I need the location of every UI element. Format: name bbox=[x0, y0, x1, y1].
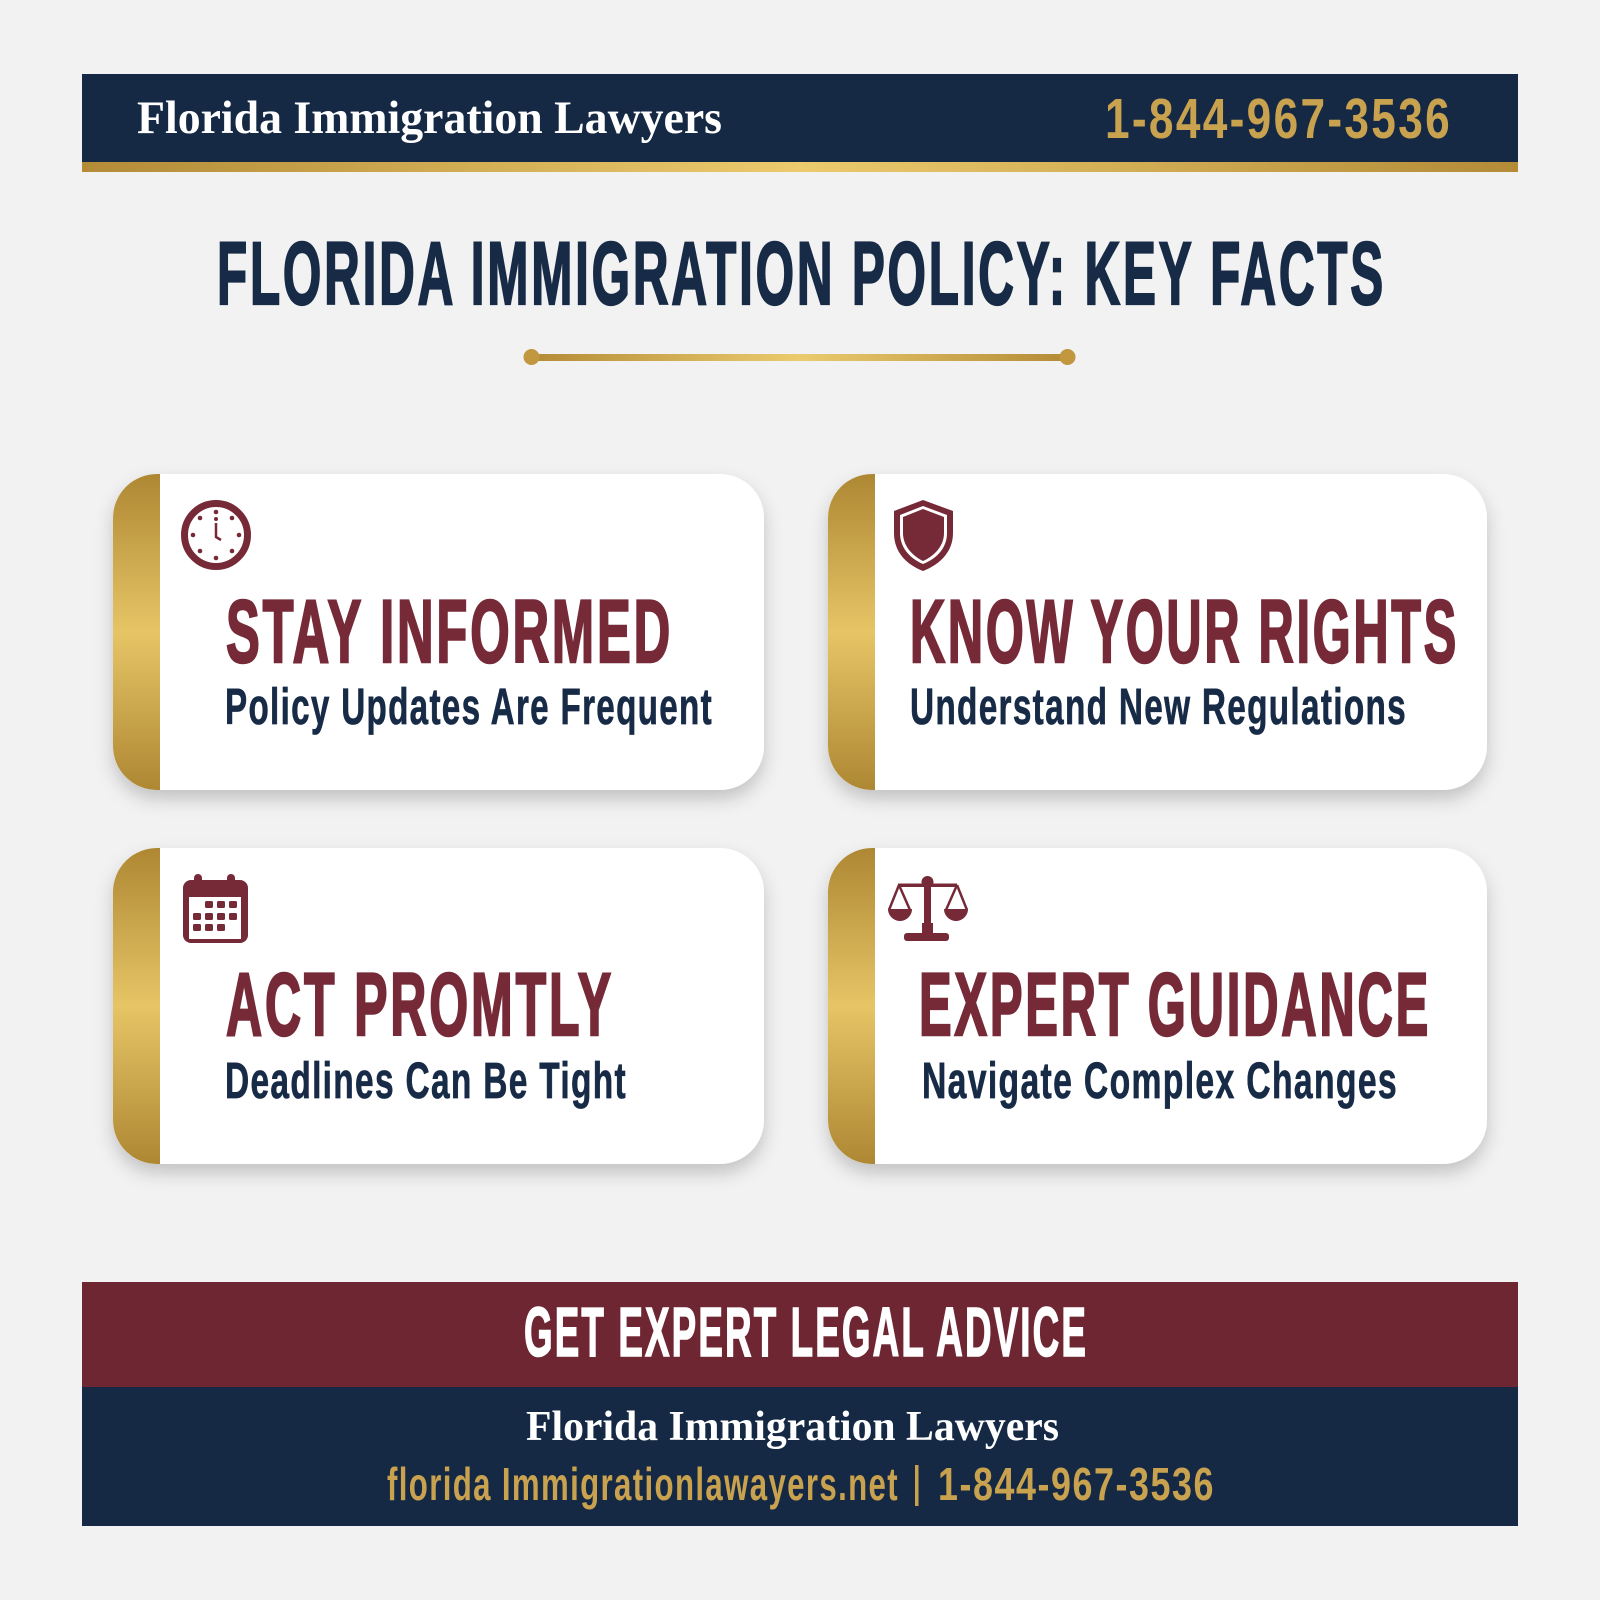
icon: calendar bbox=[183, 874, 248, 943]
panel: expert guidance bbox=[828, 848, 1487, 1164]
call to action: GET EXPERT LEGAL ADVICE bbox=[524, 1293, 1088, 1371]
panel: act promptly bbox=[113, 848, 764, 1164]
panel: know your rights bbox=[828, 474, 1487, 790]
gold edge bbox=[828, 474, 875, 790]
footer banner bbox=[82, 1282, 1518, 1387]
gold edge bbox=[113, 474, 160, 790]
header gold rule bbox=[82, 162, 1518, 172]
card heading: STAY INFORMED bbox=[226, 581, 673, 681]
footer firm name: Florida Immigration Lawyers bbox=[526, 1404, 1059, 1450]
card text: Deadlines Can Be Tight bbox=[225, 1052, 627, 1109]
footer separator bbox=[915, 1465, 918, 1506]
header firm name: Florida Immigration Lawyers bbox=[137, 92, 722, 144]
gold edge bbox=[113, 848, 160, 1164]
card text: Policy Updates Are Frequent bbox=[225, 678, 713, 735]
header phone number: 1-844-967-3536 bbox=[1105, 87, 1452, 151]
card heading: ACT PROMTLY bbox=[226, 954, 614, 1054]
footer phone number: 1-844-967-3536 bbox=[938, 1458, 1215, 1510]
footer contact block bbox=[82, 1387, 1518, 1526]
title divider bbox=[524, 349, 1076, 365]
icon: clock bbox=[184, 504, 248, 566]
icon: shield bbox=[894, 500, 953, 571]
footer website: florida Immigrationlawayers.net bbox=[387, 1458, 899, 1510]
icon: scales of justice bbox=[888, 876, 968, 941]
header bar bbox=[82, 74, 1518, 172]
panel: stay informed bbox=[113, 474, 764, 790]
gold edge bbox=[828, 848, 875, 1164]
